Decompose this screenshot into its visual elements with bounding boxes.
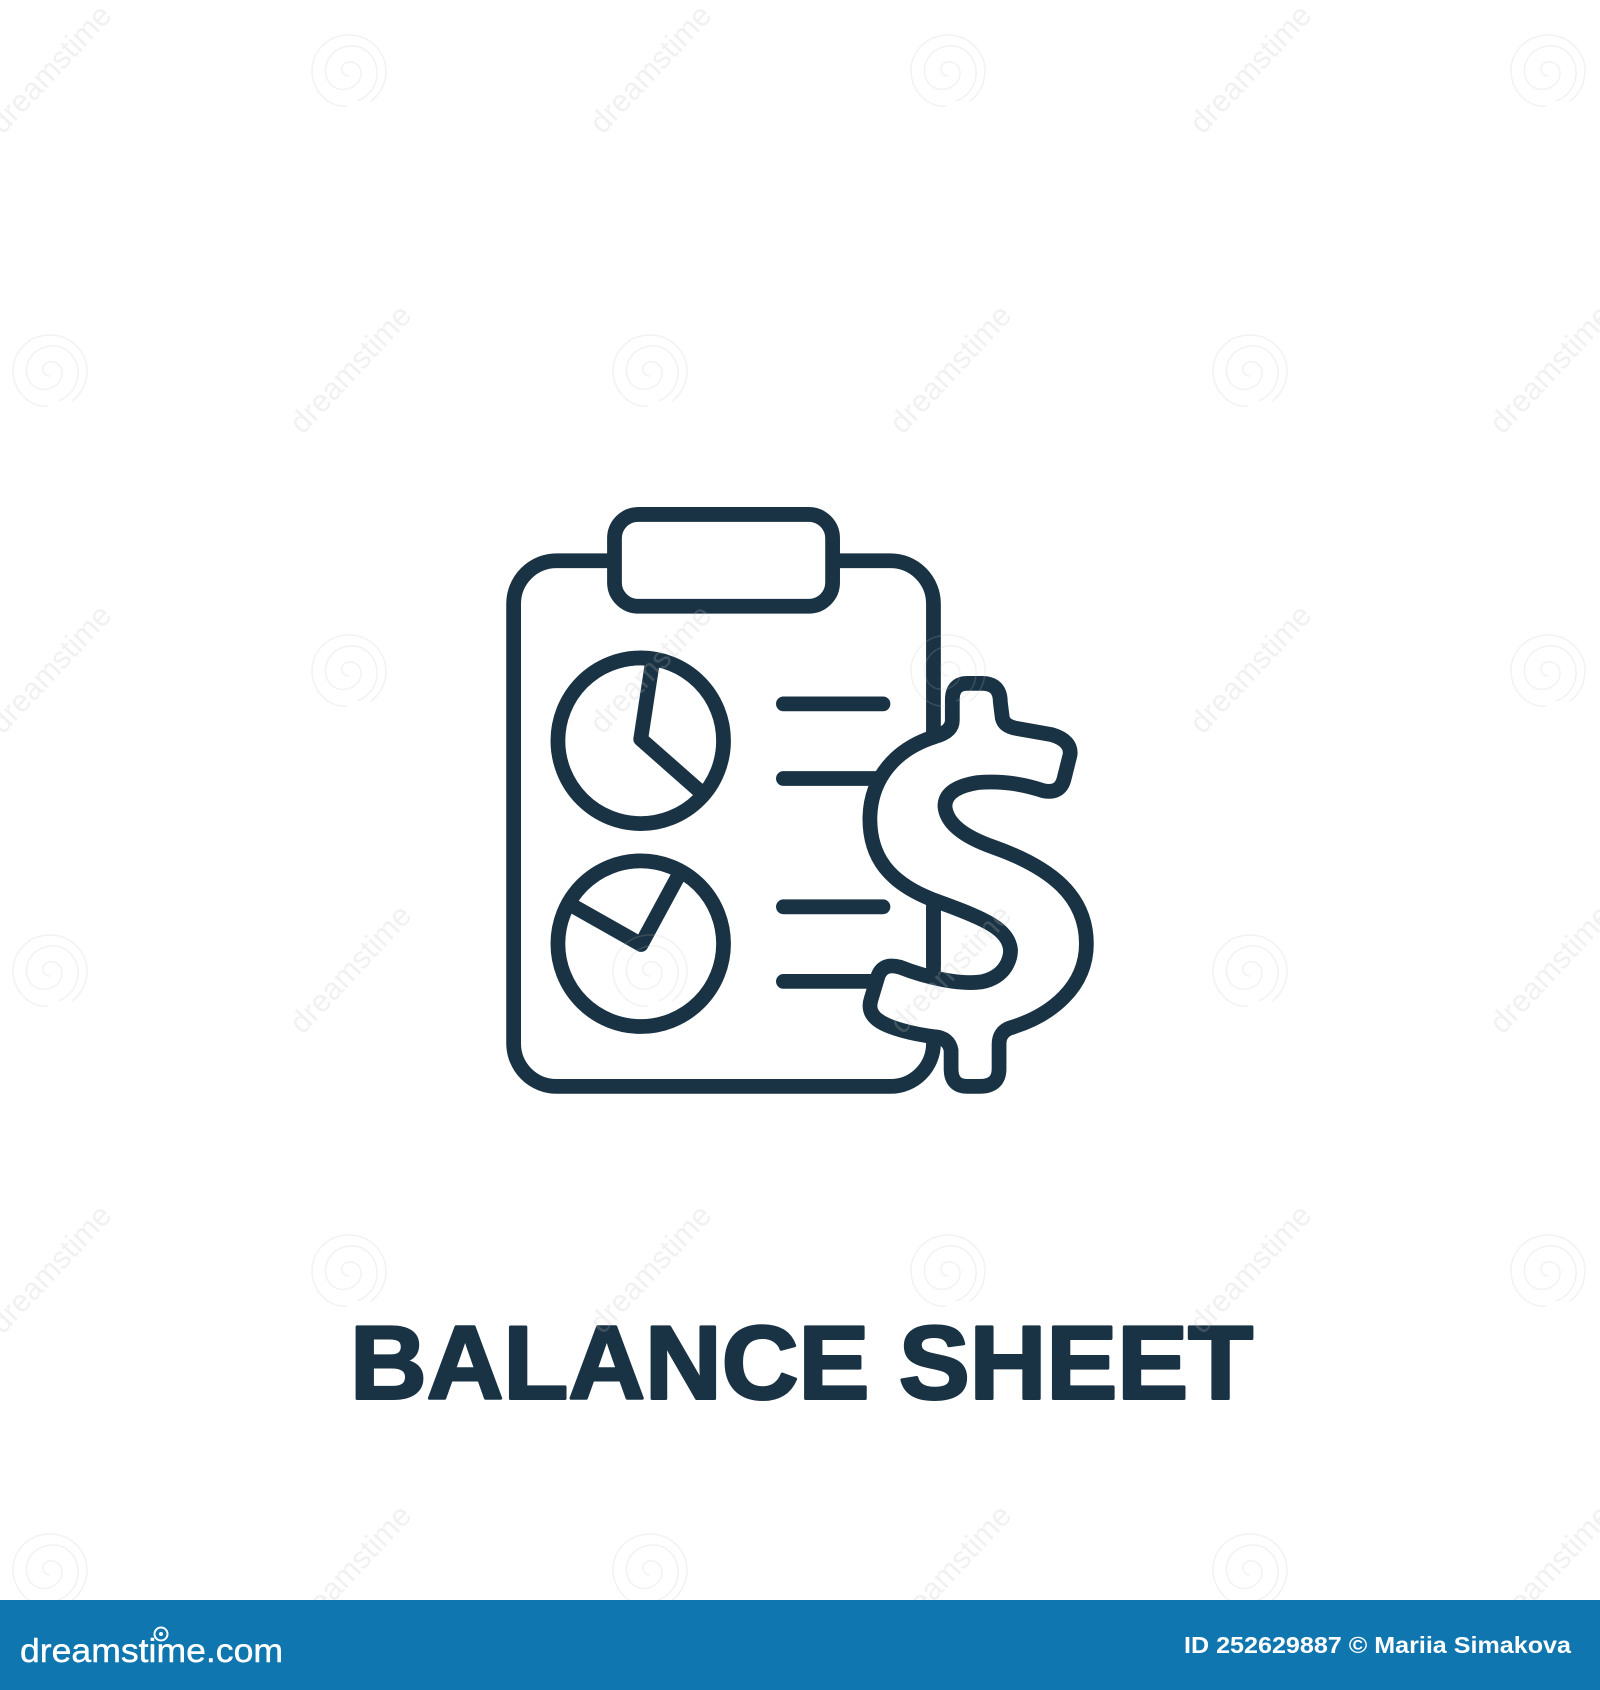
list lines — [783, 704, 883, 981]
watermark pattern: dreamstime — [282, 898, 418, 1040]
title: BALANCE SHEET — [350, 1306, 1253, 1422]
watermark pattern: dreamstime — [282, 298, 418, 440]
pie chart top — [558, 658, 724, 824]
clipboard body — [514, 561, 933, 1086]
watermark pattern: dreamstime — [1182, 1198, 1318, 1340]
watermark pattern: dreamstime — [282, 1498, 418, 1640]
footer credit: ID 252629887 © Mariia Simakova — [1184, 1632, 1572, 1658]
footer band — [0, 1600, 1600, 1690]
watermark pattern: dreamstime — [582, 1198, 718, 1340]
watermark pattern: dreamstime — [1182, 0, 1318, 140]
watermark pattern: dreamstime — [582, 0, 718, 140]
watermark pattern: dreamstime — [582, 598, 718, 740]
dollar sign — [870, 683, 1086, 1086]
clipboard edge seen through dollar counter — [915, 907, 951, 966]
watermark pattern: dreamstime — [882, 898, 1018, 1040]
watermark pattern: dreamstime — [1182, 598, 1318, 740]
pie chart bottom — [558, 861, 724, 1027]
icon: clipboard with pie charts and dollar sign — [514, 514, 1086, 1086]
footer logo: dreamstime.com: dreamstime.com — [20, 1632, 283, 1669]
watermark pattern: dreamstime — [882, 1498, 1018, 1640]
watermark pattern: dreamstime — [882, 298, 1018, 440]
clipboard clip — [614, 514, 833, 606]
